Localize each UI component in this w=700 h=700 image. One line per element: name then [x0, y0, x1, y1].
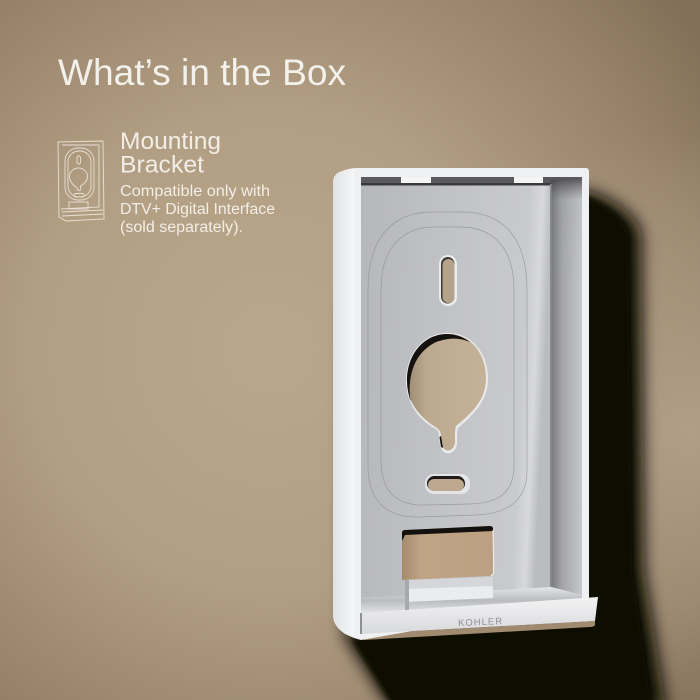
side face of frame: [333, 168, 358, 636]
outer frame: [333, 168, 589, 640]
rectangular cut-out: [402, 526, 494, 580]
back plate: [361, 186, 551, 598]
icon: mounting bracket outline: [58, 141, 104, 221]
text block: mounting bracket description: DTV+ Digital Interface: [120, 201, 275, 218]
top slot: [439, 255, 457, 306]
heading: mounting bracket: Mounting: [120, 128, 221, 155]
center keyhole opening: [406, 333, 488, 453]
tab below cut-out: [405, 577, 493, 610]
front lip: [360, 597, 598, 634]
kohler logo: KOHLER: [458, 616, 503, 629]
cast shadow of bracket: [345, 190, 666, 700]
raised plate outlines: [368, 212, 527, 517]
title: What’s in the Box: [58, 51, 346, 93]
text block: mounting bracket description: Compatible only with: [120, 183, 270, 200]
right inner wall: [550, 177, 582, 595]
lower slot: [425, 474, 470, 494]
mounting bracket product: [333, 168, 598, 640]
top inner gap: [361, 177, 582, 186]
text block: mounting bracket description: (sold separately).: [120, 219, 243, 236]
text block: mounting bracket description: Bracket: [120, 152, 204, 178]
floor: [361, 587, 582, 614]
text block: mounting bracket description: [120, 128, 275, 236]
underside of lip: [360, 621, 595, 640]
